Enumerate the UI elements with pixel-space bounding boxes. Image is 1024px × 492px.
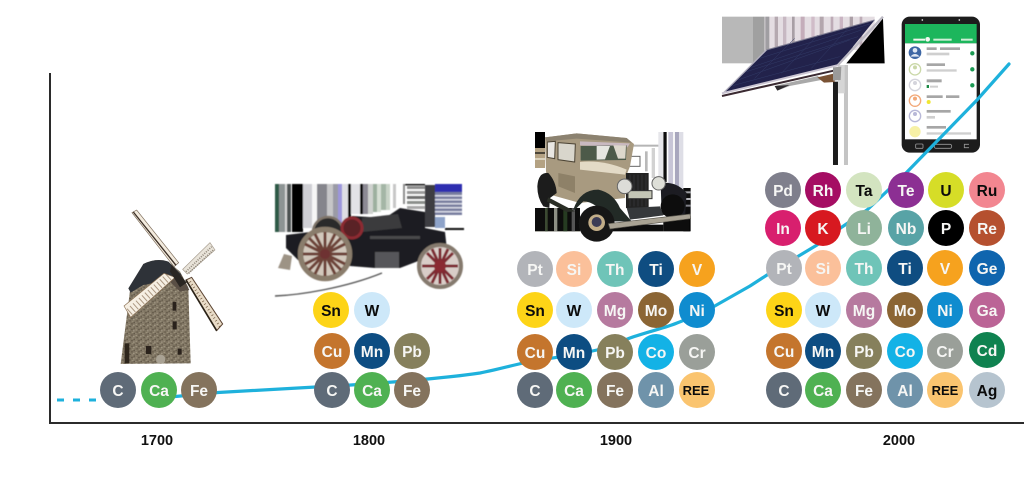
year label: 2000: 2000 xyxy=(883,433,915,449)
element: Nb: Nb xyxy=(896,221,916,238)
element: Rh: Rh xyxy=(813,183,833,200)
glitch stripes behind panel xyxy=(765,17,875,50)
element: Ca: Ca xyxy=(813,383,833,400)
element: Si xyxy=(556,251,592,287)
element: Sn xyxy=(517,292,553,328)
element: Sn: Sn xyxy=(321,303,341,320)
element: Pt: Pt xyxy=(527,262,543,279)
element: Ag xyxy=(969,372,1005,408)
trend line: dashed early section xyxy=(57,398,104,402)
element: Ni: Ni xyxy=(937,303,953,320)
element: Ti: Ti xyxy=(898,261,912,278)
element: Cu: Cu xyxy=(774,344,794,361)
year label: 1700: 1700 xyxy=(141,433,173,449)
element: Fe: Fe xyxy=(606,383,624,400)
element: Pt xyxy=(766,250,802,286)
element: Fe: Fe xyxy=(855,383,873,400)
element: Pb xyxy=(597,334,633,370)
element: Mn xyxy=(556,334,592,370)
element: Mo xyxy=(638,292,674,328)
element: Pd xyxy=(765,172,801,208)
element: Al xyxy=(887,372,923,408)
x axis xyxy=(49,422,1024,424)
element: Pb: Pb xyxy=(854,344,874,361)
element group: 1900 xyxy=(517,251,715,408)
element: Mo: Mo xyxy=(894,303,916,320)
element: Al xyxy=(638,372,674,408)
element: Cd: Cd xyxy=(977,343,997,360)
element: REE: REE xyxy=(683,383,710,398)
element: REE: REE xyxy=(932,383,959,398)
element: U: U xyxy=(940,183,952,200)
element: Pd: Pd xyxy=(773,183,793,200)
element: Al: Al xyxy=(897,383,913,400)
element: Te xyxy=(888,172,924,208)
element: Ta xyxy=(846,172,882,208)
element: Nb xyxy=(888,210,924,246)
element: In: In xyxy=(776,221,790,238)
element: In xyxy=(765,210,801,246)
element: Ru xyxy=(969,172,1005,208)
element group: 1700 xyxy=(100,372,217,408)
element: Ge xyxy=(969,250,1005,286)
element: W xyxy=(805,292,841,328)
element: Cr: Cr xyxy=(688,345,706,362)
element: Sn: Sn xyxy=(774,303,794,320)
element: Ga xyxy=(969,292,1005,328)
element: Li xyxy=(846,210,882,246)
element: Ru: Ru xyxy=(977,183,997,200)
element: Th: Th xyxy=(855,261,873,278)
element: V: V xyxy=(940,261,951,278)
element: Co: Co xyxy=(895,344,915,361)
element: W: W xyxy=(816,303,831,320)
element: Fe: Fe xyxy=(403,383,421,400)
year label: 1900: 1900 xyxy=(600,433,632,449)
element: W: W xyxy=(567,303,582,320)
element: Mo: Mo xyxy=(645,303,667,320)
element: Pb: Pb xyxy=(402,344,422,361)
element: REE xyxy=(679,372,715,408)
element: Cu xyxy=(766,333,802,369)
element: Pb: Pb xyxy=(605,345,625,362)
element: Cu: Cu xyxy=(322,344,342,361)
element: Si: Si xyxy=(567,262,581,279)
element: Si: Si xyxy=(816,261,830,278)
element: Ni xyxy=(679,292,715,328)
element: W xyxy=(556,292,592,328)
image: smartphone with chat app xyxy=(902,17,980,153)
image: windmill xyxy=(121,210,223,364)
element: Pt: Pt xyxy=(776,261,792,278)
element: Ca xyxy=(556,372,592,408)
element: V xyxy=(679,251,715,287)
element: Fe xyxy=(846,372,882,408)
element: Re: Re xyxy=(977,221,997,238)
element: P xyxy=(928,210,964,246)
trend line: rising curve of element use xyxy=(170,64,1009,397)
element: Mo xyxy=(887,292,923,328)
element: Cd xyxy=(969,332,1005,368)
element: Rh xyxy=(805,172,841,208)
element: Ti xyxy=(638,251,674,287)
element: Mn xyxy=(805,333,841,369)
element group: 2000 xyxy=(765,172,1005,408)
element: K xyxy=(805,210,841,246)
element: W: W xyxy=(365,303,380,320)
element: Mn: Mn xyxy=(812,344,834,361)
element: Ti: Ti xyxy=(649,262,663,279)
element: Li: Li xyxy=(857,221,871,238)
element: C: C xyxy=(529,383,541,400)
element: C: C xyxy=(778,383,790,400)
year label: 1800: 1800 xyxy=(353,433,385,449)
element: Co: Co xyxy=(646,345,666,362)
element: K: K xyxy=(817,221,829,238)
element: Mn: Mn xyxy=(563,345,585,362)
element: Cu: Cu xyxy=(525,345,545,362)
element: Ta: Ta xyxy=(856,183,873,200)
element: Ca xyxy=(805,372,841,408)
element: Cr: Cr xyxy=(936,344,954,361)
element: Co xyxy=(887,333,923,369)
element: P: P xyxy=(941,221,951,238)
element: U xyxy=(928,172,964,208)
element: Ni: Ni xyxy=(689,303,705,320)
element: Fe: Fe xyxy=(190,383,208,400)
element: Ca: Ca xyxy=(362,383,382,400)
big rear wheel xyxy=(300,230,350,278)
element: Re xyxy=(969,210,1005,246)
element: Mg xyxy=(597,292,633,328)
element: Th: Th xyxy=(606,262,624,279)
element: Al: Al xyxy=(648,383,664,400)
element: V: V xyxy=(692,262,703,279)
element: REE xyxy=(927,372,963,408)
element: V xyxy=(927,250,963,286)
element: Ni xyxy=(927,292,963,328)
image: traction engine xyxy=(275,184,464,296)
element: Ca: Ca xyxy=(149,383,169,400)
element: Fe xyxy=(597,372,633,408)
element: C xyxy=(517,372,553,408)
element: Co xyxy=(638,334,674,370)
image: solar panel on pole xyxy=(722,17,885,165)
element: Ga: Ga xyxy=(977,303,998,320)
element: Pt xyxy=(517,251,553,287)
element: Cr xyxy=(927,333,963,369)
element: Te: Te xyxy=(898,183,915,200)
element: Mn: Mn xyxy=(361,344,383,361)
element: Mg xyxy=(846,292,882,328)
element: Ca: Ca xyxy=(564,383,584,400)
element: C: C xyxy=(326,383,338,400)
element: C xyxy=(766,372,802,408)
small front wheel xyxy=(419,245,461,287)
y axis xyxy=(49,73,51,424)
element: Cr xyxy=(679,334,715,370)
element: Th xyxy=(846,250,882,286)
element: Sn xyxy=(766,292,802,328)
glitch stripes behind engine xyxy=(275,184,464,232)
element: Ti xyxy=(887,250,923,286)
element: C: C xyxy=(112,383,124,400)
element: Ag: Ag xyxy=(977,383,997,400)
element: Mg: Mg xyxy=(853,303,875,320)
element: Mg: Mg xyxy=(604,303,626,320)
element: Sn: Sn xyxy=(525,303,545,320)
image: vintage car xyxy=(535,132,691,242)
element: Pb xyxy=(846,333,882,369)
element: Ge: Ge xyxy=(977,261,998,278)
element group: 1800 xyxy=(313,292,430,408)
element: Th xyxy=(597,251,633,287)
element: Cu xyxy=(517,334,553,370)
element: Si xyxy=(805,250,841,286)
